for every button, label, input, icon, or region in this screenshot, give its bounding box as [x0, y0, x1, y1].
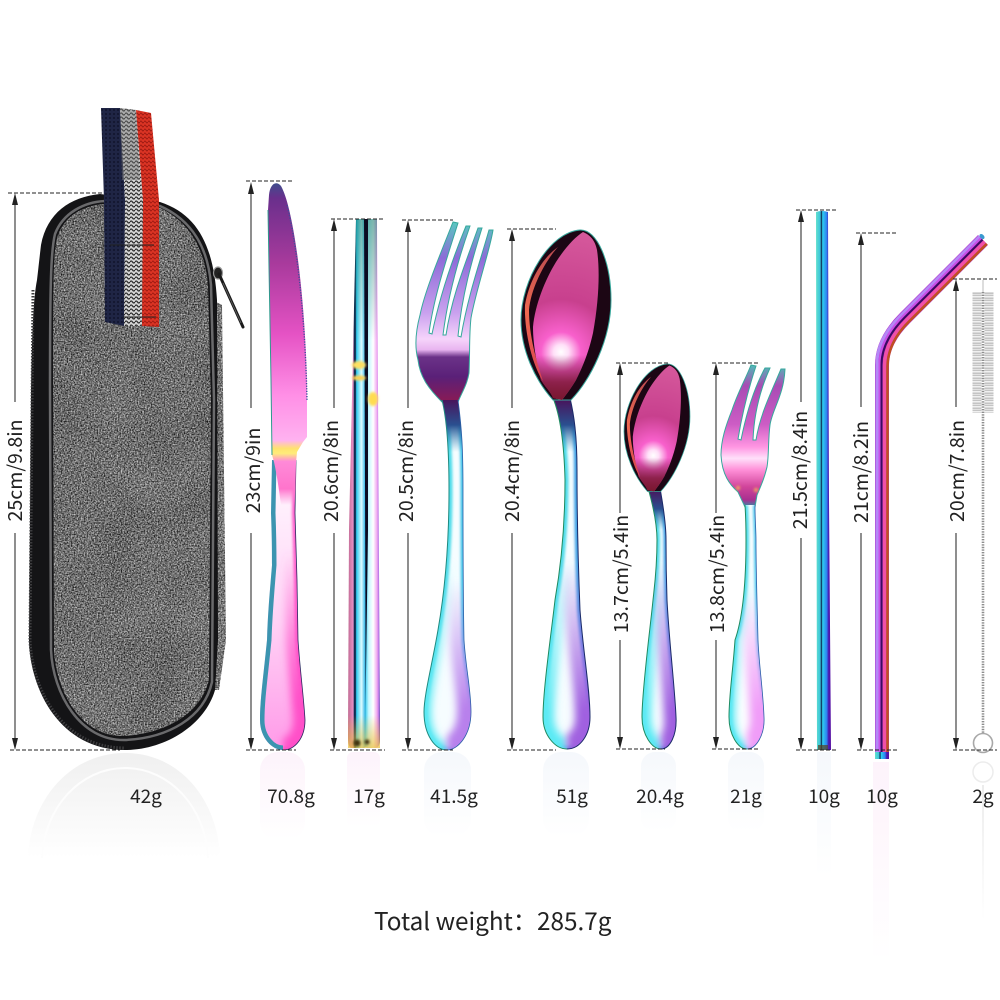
zipper band [29, 194, 218, 750]
dimension: small fork 13.8cm/5.4in: 13.8cm/5.4in [701, 515, 730, 633]
dimension: knife 23cm/9in: 23cm/9in [237, 428, 266, 513]
dimension: brush 20cm/7.8in [941, 279, 997, 750]
weight labels: 10g [866, 782, 898, 809]
weight labels: 41.5g [430, 782, 478, 809]
back felt flap [208, 300, 226, 690]
weight labels [130, 782, 994, 809]
large spoon [521, 230, 611, 752]
reflections under the products [28, 752, 993, 962]
small fork [721, 365, 785, 753]
dimension: spoon 20.4cm/8in: 20.4cm/8in [496, 420, 525, 522]
weight labels: 70.8g [267, 782, 315, 809]
dimension: small spoon 13.7cm/5.4in: 13.7cm/5.4in [605, 515, 634, 633]
dimension: spoon 20.4cm/8in [496, 229, 556, 750]
dimension: brush 20cm/7.8in: 20cm/7.8in [941, 420, 970, 522]
dimension: fork 20.5cm/8in: 20.5cm/8in [390, 420, 419, 522]
dimension: fork 20.5cm/8in [390, 220, 453, 750]
weight labels: 17g [353, 782, 385, 809]
small spoon [624, 364, 690, 752]
dimension: bent straw 21cm/8.2in: 21cm/8.2in [845, 421, 874, 523]
dimension: knife 23cm/9in [237, 181, 296, 750]
large fork [416, 222, 493, 753]
dimension: small spoon 13.7cm/5.4in [605, 363, 668, 749]
dimension: small fork 13.8cm/5.4in [701, 363, 760, 749]
weight labels: 42g [130, 782, 162, 809]
weight labels: 10g [808, 782, 840, 809]
strap: navy, white and red webbing [101, 108, 159, 327]
weight labels: 21g [730, 782, 762, 809]
weight labels: 20.4g [636, 782, 684, 809]
knife [260, 183, 308, 750]
dimension: chopsticks 20.6cm/8in [315, 219, 385, 750]
straight straw [816, 211, 831, 750]
dimension: straight straw 21.5cm/8.4in: 21.5cm/8.4in [784, 411, 813, 529]
pouch: felt zipper case [29, 194, 226, 750]
felt panel [53, 204, 211, 736]
dimension: straight straw 21.5cm/8.4in [784, 210, 837, 750]
dimension: chopsticks 20.6cm/8in: 20.6cm/8in [315, 420, 344, 522]
total weight: Total weight：285.7g [374, 902, 612, 937]
cleaning brush [972, 280, 994, 752]
icon: zipper pull [214, 267, 243, 327]
piping [50, 201, 214, 740]
weight labels: 2g [972, 782, 994, 809]
bent straw [875, 233, 987, 759]
dimension: bent straw 21cm/8.2in [845, 233, 898, 750]
chopsticks [348, 219, 380, 748]
weight labels: 51g [556, 782, 588, 809]
dimension: pouch 25cm/9.8in [0, 193, 120, 750]
